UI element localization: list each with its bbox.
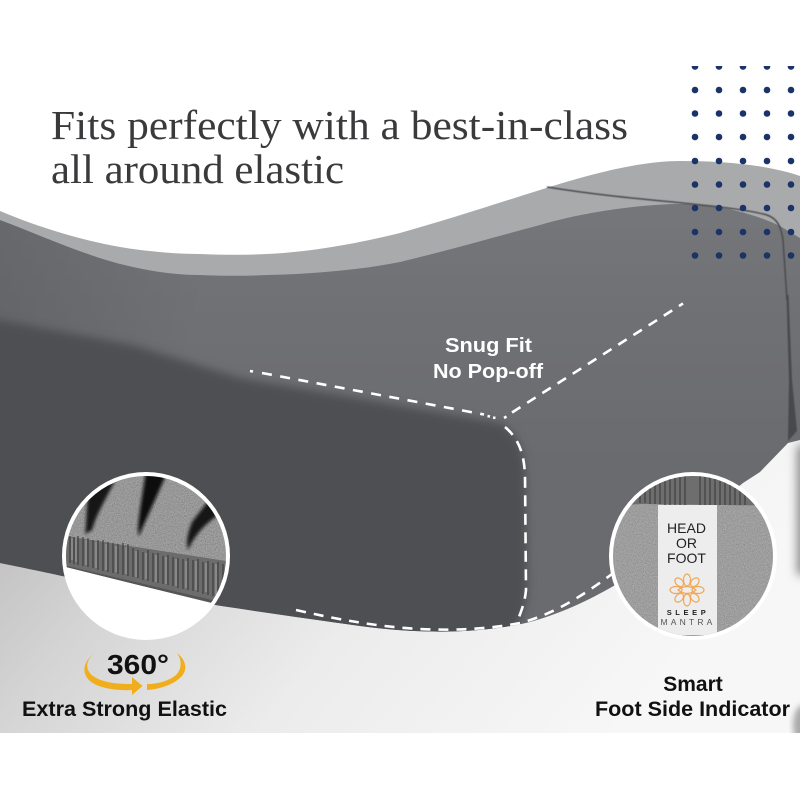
circle: foot side indicator: HEAD: [667, 520, 706, 536]
label: smart foot side indicator: Foot Side Indicator: [595, 698, 790, 721]
title: [51, 102, 628, 192]
title: all around elastic: [51, 146, 344, 192]
label: snug fit: No Pop-off: [433, 361, 543, 383]
darker front face: [0, 312, 528, 650]
circle: foot side indicator: FOOT: [667, 550, 706, 566]
circle: elastic close-up: [62, 472, 230, 640]
mattress base: [0, 440, 800, 733]
label: extra strong elastic: Extra Strong Elastic: [22, 698, 227, 721]
label: snug fit: Snug Fit: [445, 335, 532, 357]
fabric: [66, 476, 226, 603]
icon: mandala logo: [670, 574, 704, 606]
label: snug fit: [433, 335, 543, 383]
elastic top: [632, 476, 755, 506]
label: smart foot side indicator: Smart: [663, 673, 723, 696]
circle: foot side indicator: MANTRA: [660, 617, 716, 627]
dashed fit outline: [250, 304, 683, 630]
text: 360 degrees: 360°: [107, 649, 169, 680]
fitted sheet: [0, 200, 800, 650]
dot grid: [692, 63, 794, 259]
circle: foot side indicator: SLEEP: [667, 608, 709, 617]
label: smart foot side indicator: [595, 673, 790, 721]
background photo: mattress with sheet: [0, 161, 800, 745]
circle: foot side indicator: [609, 470, 780, 642]
title: Fits perfectly with a best-in-class: [51, 102, 628, 148]
pleat shadows: [83, 482, 117, 536]
elastic band: [66, 536, 226, 603]
label tag: [658, 505, 717, 635]
circle: foot side indicator: OR: [676, 535, 697, 551]
corner fold line: [547, 187, 787, 300]
icon: 360 rotation arrow: [84, 653, 185, 695]
sheet light top band: [0, 161, 800, 276]
